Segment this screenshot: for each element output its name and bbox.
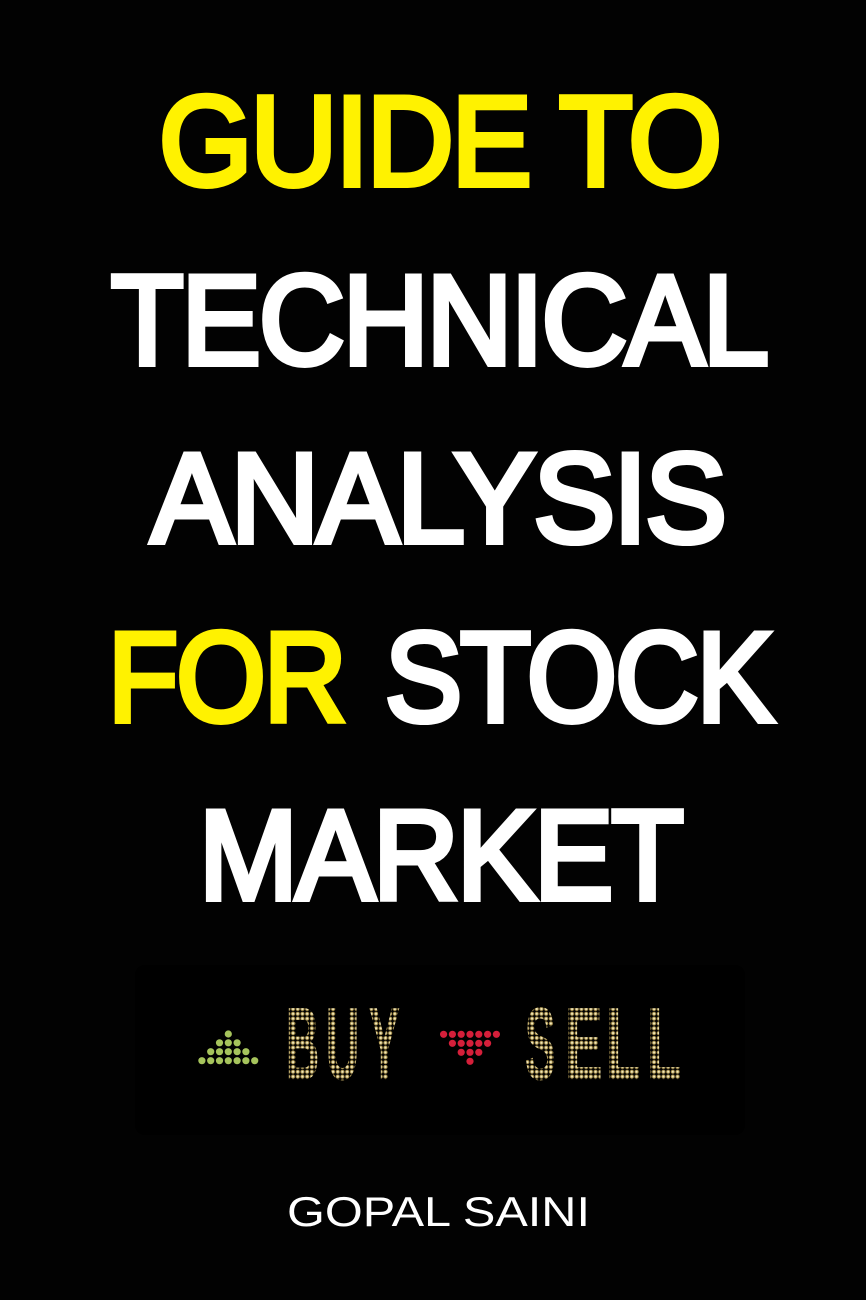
LED word: SELL: L — [606, 987, 640, 1101]
title: ANALYSIS: ANALYSIS — [151, 427, 725, 569]
title: STOCK: STOCK — [385, 606, 773, 748]
LED word: SELL: S — [525, 986, 556, 1101]
LED word: BUY — [286, 986, 400, 1101]
LED word: BUY: U — [326, 986, 359, 1101]
LED word: BUY: B — [286, 986, 319, 1101]
title: GUIDE TO: GUIDE TO — [159, 70, 720, 212]
title: MARKET: MARKET — [199, 784, 682, 926]
LED word: SELL: E — [565, 987, 602, 1101]
title: FOR: FOR — [108, 606, 345, 748]
icon: green up arrow — [198, 1030, 258, 1064]
LED word: BUY: Y — [369, 986, 400, 1101]
LED word: SELL: L — [647, 987, 681, 1101]
title: TECHNICAL: TECHNICAL — [111, 249, 767, 391]
icon: red down arrow — [440, 1031, 500, 1065]
LED word: SELL — [525, 986, 681, 1101]
LED ticker panel — [135, 965, 745, 1135]
author name: GOPAL SAINI — [287, 1188, 590, 1235]
